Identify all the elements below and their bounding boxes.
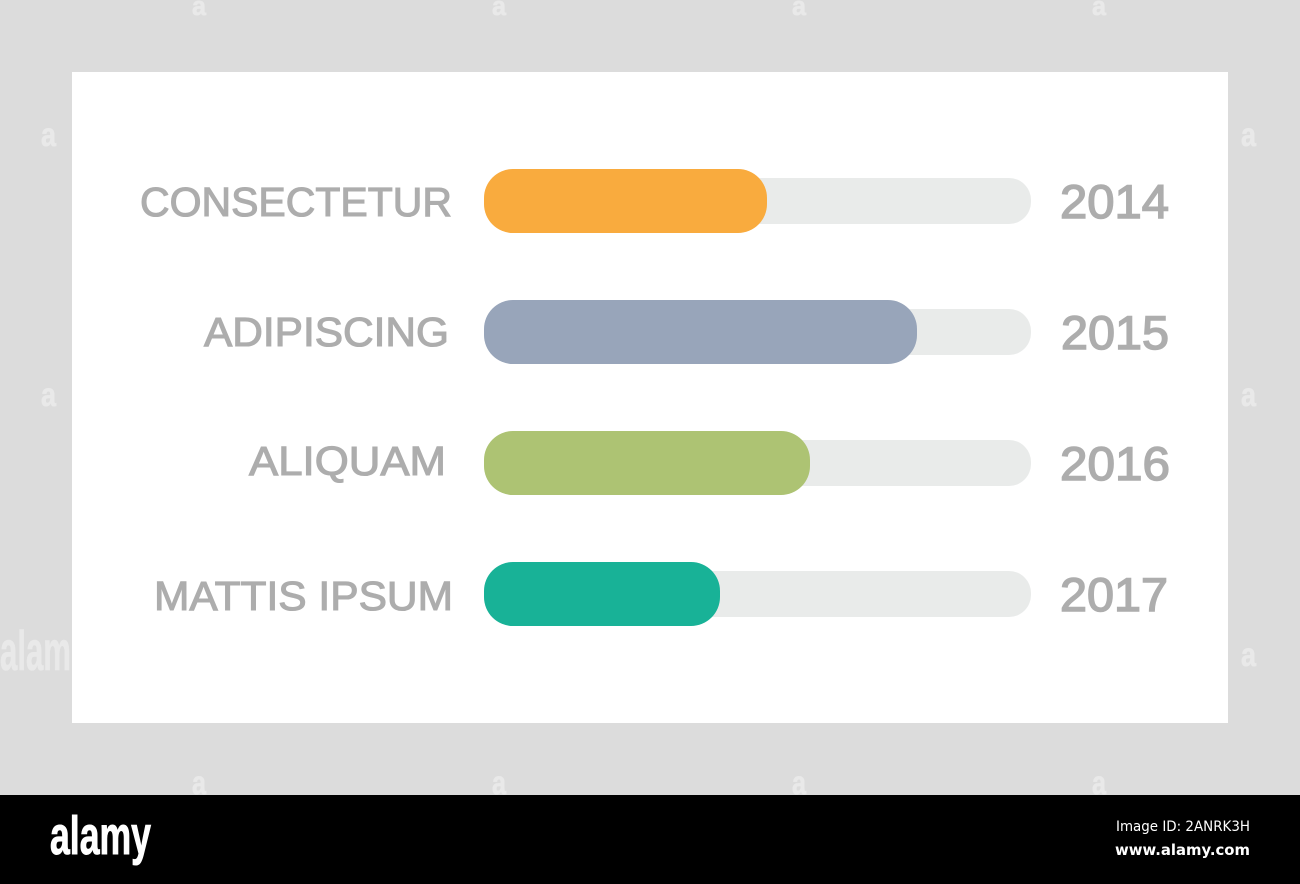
image id: Image ID: 2ANRK3H bbox=[1116, 819, 1250, 835]
label: ADIPISCING: ADIPISCING bbox=[204, 309, 449, 355]
track 2015 bbox=[484, 309, 1031, 355]
track 2017 bbox=[484, 571, 1031, 617]
watermark marks: a bbox=[41, 116, 57, 153]
watermark marks: a bbox=[1092, 764, 1106, 801]
year 2015: 2015 bbox=[1061, 306, 1169, 359]
track 2014 bbox=[484, 178, 1031, 224]
footer bar bbox=[0, 795, 1300, 884]
watermark marks: a bbox=[1241, 376, 1257, 413]
year 2017: 2017 bbox=[1060, 568, 1168, 621]
website: www.alamy.com bbox=[1115, 841, 1250, 859]
label: CONSECTETUR: CONSECTETUR bbox=[140, 179, 452, 225]
watermark marks: a bbox=[192, 764, 206, 801]
bar 2015 bbox=[484, 300, 917, 364]
row 2016 bbox=[249, 431, 1170, 495]
bar 2016 bbox=[484, 431, 810, 495]
year 2014: 2014 bbox=[1060, 175, 1169, 228]
row 2017 bbox=[154, 562, 1168, 626]
watermark marks: a bbox=[792, 764, 806, 801]
label: MATTIS IPSUM: MATTIS IPSUM bbox=[154, 573, 453, 619]
watermark marks: a bbox=[1241, 116, 1257, 153]
logo: alamy: alamy bbox=[50, 806, 151, 866]
panel: white card bbox=[72, 72, 1228, 723]
row 2015 bbox=[204, 300, 1169, 364]
track 2016 bbox=[484, 440, 1031, 486]
row 2014 bbox=[140, 169, 1169, 233]
bar 2017 bbox=[484, 562, 720, 626]
year 2016: 2016 bbox=[1060, 437, 1170, 490]
watermark marks: a bbox=[1241, 636, 1257, 673]
watermark marks: a bbox=[492, 764, 506, 801]
bar 2014 bbox=[484, 169, 767, 233]
watermark marks: alam bbox=[0, 619, 71, 682]
watermark marks: a bbox=[41, 376, 57, 413]
label: ALIQUAM: ALIQUAM bbox=[249, 438, 446, 484]
